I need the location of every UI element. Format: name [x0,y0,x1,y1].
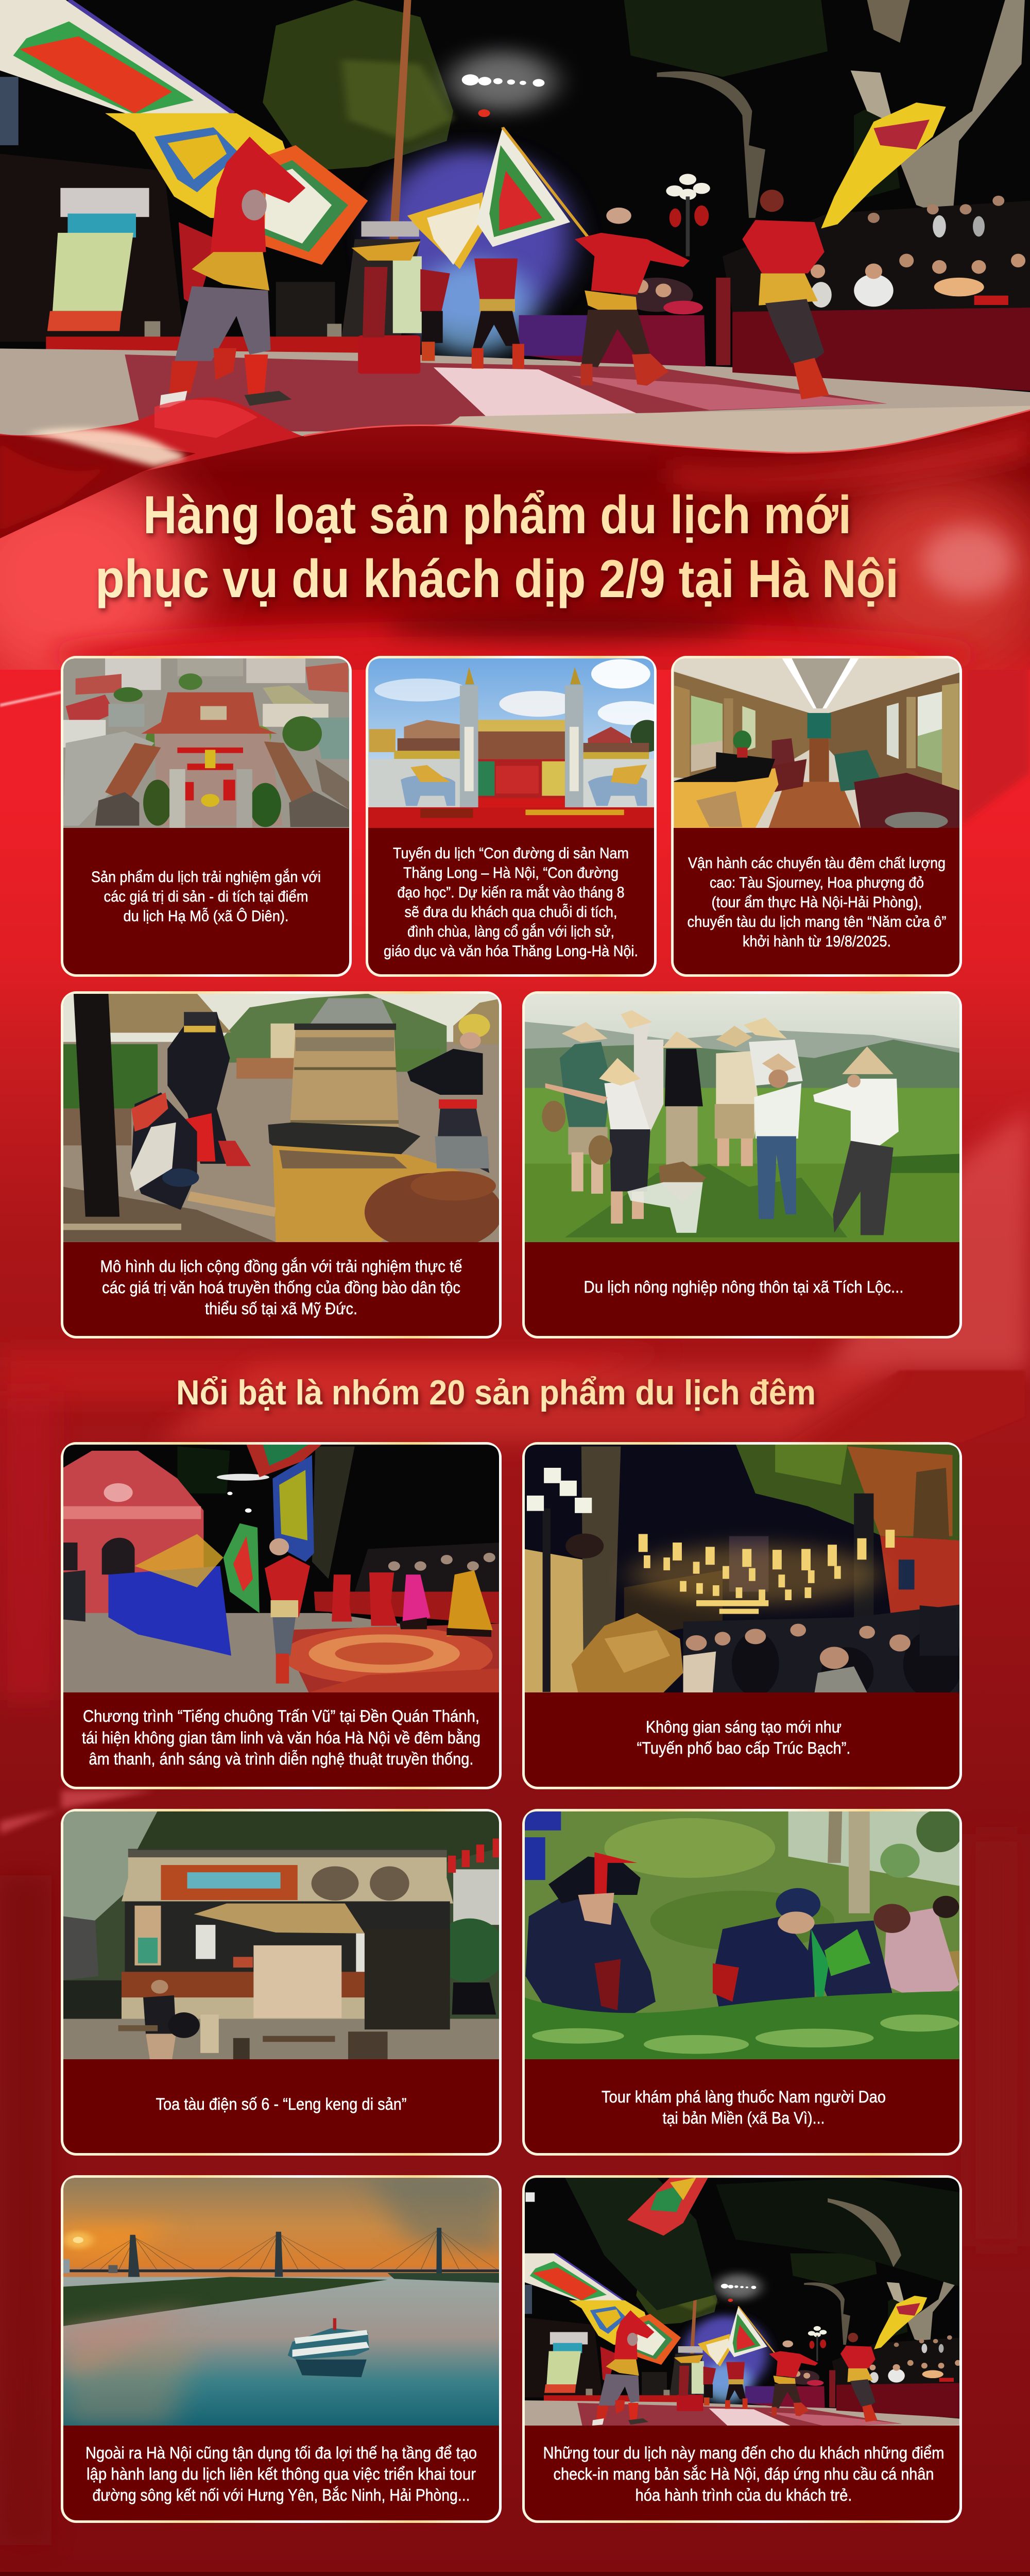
caption: Du lịch nông nghiệp nông thôn tại xã Tích Lộc... [584,1278,903,1296]
panel: Tiếng chuông Trấn Vũ programme [59,1442,506,1788]
pole [384,0,411,335]
trees [263,0,453,171]
caption: (tour ẩm thực Hà Nội-Hải Phòng), [712,894,922,911]
caption: chuyến tàu du lịch mang tên “Năm cửa ô” [687,913,947,930]
title [95,485,899,609]
temple and banner [0,154,184,342]
caption [85,2444,477,2504]
caption [602,2088,886,2127]
hero photo: flag dance performance at night [0,0,1030,470]
caption: Mô hình du lịch cộng đồng gắn với trải nghiệm thực tế [100,1257,462,1276]
caption: giáo dục và văn hóa Thăng Long-Hà Nội. [384,943,638,960]
red step [46,336,362,353]
audience [723,196,1030,312]
caption: du lịch Hạ Mỗ (xã Ô Diên). [124,907,288,925]
panel: community tourism Mỹ Đức [59,991,506,1337]
dancers centre [363,259,524,368]
panel: Dao medicinal village tour [519,1807,966,2155]
caption [687,855,947,950]
caption: các giá trị văn hoá truyền thống của đồng bào dân tộc [102,1278,460,1297]
panel: agricultural tourism Tích Lộc [519,991,966,1337]
small flag [407,192,483,269]
caption: Sản phẩm du lịch trải nghiệm gắn với [91,869,321,886]
central flag [476,127,570,247]
caption: tái hiện không gian tâm linh và văn hóa Hà Nội về đêm bằng [82,1728,480,1747]
right flag [821,103,946,229]
caption: check-in mang bản sắc Hà Nội, đáp ứng nhu cầu cá nhân [553,2465,934,2483]
lamp post [666,174,710,256]
photo: temple gate with elephants [365,655,663,831]
caption [637,1718,851,1757]
floor [0,349,1030,470]
photo: vintage tram café [59,1807,506,2064]
photo: Dao people gathering herbs [519,1807,966,2066]
caption: Tour khám phá làng thuốc Nam người Dao [602,2088,886,2106]
caption: đạo học”. Dự kiến ra mắt vào tháng 8 [398,884,624,901]
caption: lập hành lang du lịch liên kết thông qua việc triển khai tour [87,2465,476,2483]
caption: hóa hành trình của du khách trẻ. [636,2486,852,2504]
panel: Thăng Long heritage route [365,655,663,976]
photo: lantern-lit street at night [519,1442,966,1699]
photo: tourists in conical hats in rice field [519,991,966,1244]
caption: Vận hành các chuyến tàu đêm chất lượng [688,855,946,872]
caption: Ngoài ra Hà Nội cũng tận dụng tối đa lợi thế hạ tầng để tạo [85,2444,477,2462]
panel: Trúc Bạch subsidy-era street [519,1442,966,1788]
caption: Chương trình “Tiếng chuông Trấn Vũ” tại Đền Quán Thánh, [83,1707,479,1725]
panel: tram car no. 6 [59,1807,506,2155]
caption: “Tuyến phố bao cấp Trúc Bạch”. [637,1739,851,1757]
caption: đình chùa, làng cổ gắn với lịch sử, [407,923,614,940]
coloured smoke [374,149,572,329]
caption [91,869,321,925]
caption: Tuyến du lịch “Con đường di sản Nam [393,845,629,862]
stage table [519,315,706,366]
photo: night ceremony at Quán Thánh temple [59,1442,506,1697]
caption: âm thanh, ánh sáng và trình diễn nghệ thuật truyền thống. [89,1750,474,1768]
dancer left [160,137,305,408]
caption [543,2444,945,2504]
caption [100,1257,462,1318]
caption: khởi hành từ 19/8/2025. [743,933,891,950]
panel: Hạ Mỗ heritage experience [59,655,355,976]
big flags left [0,0,233,115]
caption: sẽ đưa du khách qua chuỗi di tích, [405,904,617,921]
photo: bridge and tour boat at sunset [59,2175,506,2427]
panel: personalised tours for young travellers [519,2175,966,2521]
title: phục vụ du khách dịp 2/9 tại Hà Nội [95,549,899,609]
caption [82,1707,480,1768]
heading: night tourism products: Nổi bật là nhóm 20 sản phẩm du lịch đêm [176,1373,816,1412]
panel: river tours [59,2175,506,2521]
caption: cao: Tàu Sjourney, Hoa phượng đỏ [710,874,924,891]
caption [384,845,638,960]
caption: Toa tàu điện số 6 - “Leng keng di sản” [156,2095,407,2113]
caption: thiểu số tại xã Mỹ Đức. [205,1299,357,1318]
photo: ethnic women with rice wine still [59,991,506,1251]
photo: luxury train carriage [670,655,963,831]
dancer right centre [575,208,690,386]
silk ribbon banner [0,397,1030,696]
footer: sources [0,2572,1030,2576]
caption: Thăng Long – Hà Nội, “Con đường [403,865,619,882]
title: Hàng loạt sản phẩm du lịch mới [143,485,851,545]
caption: Những tour du lịch này mang đến cho du khách những điểm [543,2444,945,2462]
caption: Không gian sáng tạo mới như [646,1718,842,1736]
photo: aerial view of temple festival [59,655,355,831]
panel: night trains [670,655,963,976]
caption: các giá trị di sản - di tích tại điểm [104,888,308,905]
caption: đường sông kết nối với Hưng Yên, Bắc Ninh, Hải Phòng... [93,2486,470,2504]
stage lights [450,51,555,111]
photo: flag dance performance, wide view [519,2175,966,2452]
dancer right [742,190,829,399]
caption: tại bản Miền (xã Ba Vì)... [662,2109,825,2127]
